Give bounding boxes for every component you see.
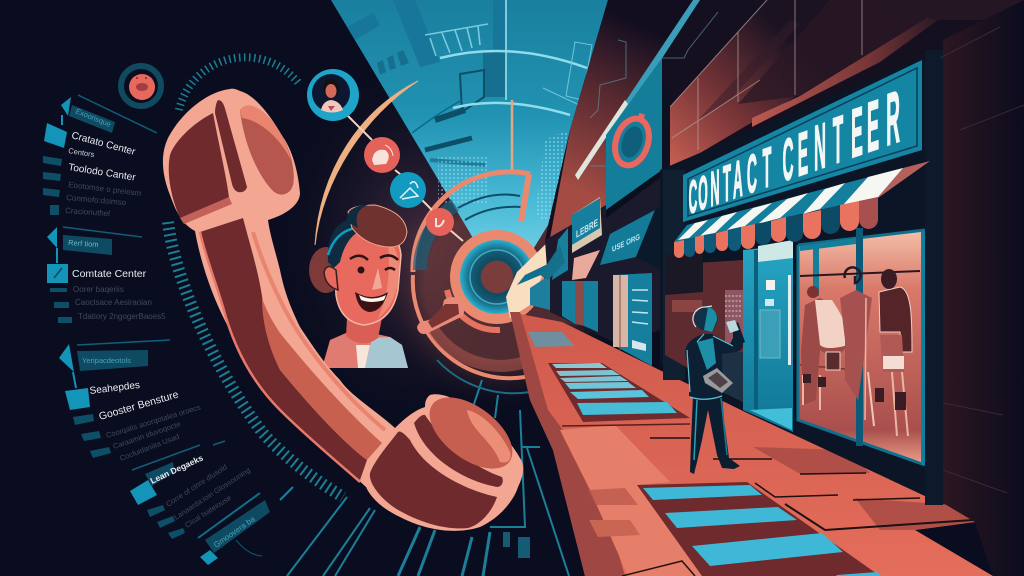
shop window: [798, 228, 925, 465]
section 3: Caraamin iduvoqocte: [112, 419, 182, 451]
decorative tick arcs: [168, 57, 343, 497]
section 1: Exoorisque: [74, 107, 112, 129]
earpiece cup: [240, 106, 294, 195]
mouthpiece groove: [414, 415, 503, 487]
section 4: Lean Degaeks: [149, 452, 205, 486]
left machine block: [665, 253, 743, 402]
sign text: C: [783, 126, 794, 195]
earpiece maroon: [169, 113, 229, 218]
mouthpiece body: [370, 431, 497, 528]
raised arm: [733, 322, 745, 348]
woman portrait: [309, 204, 408, 368]
sign text: T: [723, 153, 731, 213]
sign text: N: [814, 109, 826, 184]
section 4: [130, 441, 252, 539]
section 4: Cloal Isateiouse: [183, 493, 233, 530]
shopfront panels: [562, 281, 575, 324]
crosswalk near: [637, 482, 882, 576]
icon: cyan circle: [390, 172, 426, 208]
sign text: N: [710, 158, 720, 217]
section 2: Comtate Center: [72, 268, 147, 280]
icon: woman avatar: [307, 69, 359, 121]
section 2: [47, 227, 166, 323]
section 3: Cocfuidaniita Usad: [118, 432, 180, 463]
shop door: [743, 240, 793, 432]
right wall: [925, 0, 1024, 576]
teal door panel: [613, 273, 652, 366]
tunnel rings: [413, 172, 544, 393]
sign text: A: [733, 149, 743, 211]
mannequin left: [801, 286, 848, 410]
sign text: C: [747, 143, 757, 206]
cream light at tunnel end: [506, 238, 552, 318]
icon: ring logo: [609, 109, 656, 170]
sign text: E: [851, 91, 863, 173]
section 2: Oorer baqeriis: [73, 285, 124, 294]
teal beam: [603, 0, 700, 135]
icon: small salmon circle: [426, 208, 454, 236]
upper wall panel seams: [670, 0, 862, 150]
sign text: T: [763, 135, 771, 201]
section 3: Yeripacdeotols: [82, 356, 131, 365]
shop sign small: [552, 228, 568, 280]
section 1: Cracionuthel: [65, 206, 111, 218]
panel: main shop building: [660, 50, 940, 503]
section 2: Tdatiory 2ngogerBaoes5: [78, 312, 166, 321]
store sign: [683, 60, 922, 230]
mouthpiece cup: [417, 383, 525, 483]
section 3: [59, 340, 202, 463]
panel: left menu list: [43, 95, 270, 565]
bag: [703, 368, 733, 393]
floor lines: [280, 380, 569, 576]
icon: top-left avatar: [121, 66, 161, 106]
panel: building upper wall: [545, 0, 1024, 240]
sign text: O: [698, 166, 708, 221]
section 4: Lanaarda:ioin Glossooning: [172, 466, 252, 522]
section 1: Cratato Center: [70, 130, 137, 158]
panel: distant shops: USE ORG: [612, 231, 640, 254]
mannequin middle: [840, 267, 872, 420]
handset body: [163, 89, 523, 531]
circuit lines: [590, 12, 718, 166]
section 2: Rerf tiom: [68, 238, 99, 249]
handle maroon: [200, 218, 367, 480]
sign text: R: [886, 76, 900, 162]
section 1: Toolodo Canter: [68, 162, 137, 184]
legs: [690, 395, 740, 474]
striped awning: [674, 161, 930, 258]
panel: distant shops: [517, 170, 662, 366]
pink awning: [572, 250, 600, 280]
earpiece groove: [215, 100, 247, 192]
section 1: [43, 95, 157, 218]
sign text: C: [689, 170, 697, 225]
upper wall highlight band: [752, 18, 938, 127]
handle red band: [262, 298, 382, 460]
section 3: Seahepdes: [89, 380, 141, 397]
sign text: T: [833, 102, 843, 179]
section 1: Centors: [68, 146, 95, 159]
handle stripe: [253, 232, 385, 430]
crosswalk far: [528, 332, 575, 347]
connector dots line: [347, 115, 463, 241]
sign text: E: [867, 86, 879, 169]
section 5: Gmoovera ba: [212, 514, 257, 550]
floor blocks: [503, 532, 530, 558]
panel: cyan tunnel ceiling: [331, 0, 608, 295]
orange arc: [315, 81, 418, 245]
mannequin right: [868, 269, 912, 436]
section 2: Caoclsace Aesiraoian: [75, 298, 152, 307]
section 5: [198, 493, 270, 565]
section 1: Conmofo:dsimso: [66, 193, 127, 207]
section 3: Coorqatis aoorqotalea oroecs: [105, 402, 202, 440]
teal awning: [600, 210, 655, 265]
torso: [685, 334, 743, 399]
tunnel glow: [270, 50, 570, 430]
teal banner with logo: [606, 58, 670, 218]
sidewalk and curb: [510, 312, 993, 576]
telephone handset: [163, 89, 525, 531]
icon: salmon circle: [364, 137, 400, 173]
standing person: [685, 306, 745, 474]
panel: distant shops: LEBRE: [576, 217, 598, 241]
crosswalk middle: [548, 363, 690, 422]
section 3: Gooster Bensture: [98, 389, 180, 423]
section 4: Corre of cinre dlusold: [164, 462, 229, 509]
ring glow: [375, 160, 625, 410]
section 1: Eootomse o preiesm: [68, 180, 142, 198]
floating salmon glove: [417, 297, 465, 334]
head: [694, 308, 718, 330]
sign text: E: [798, 120, 808, 190]
